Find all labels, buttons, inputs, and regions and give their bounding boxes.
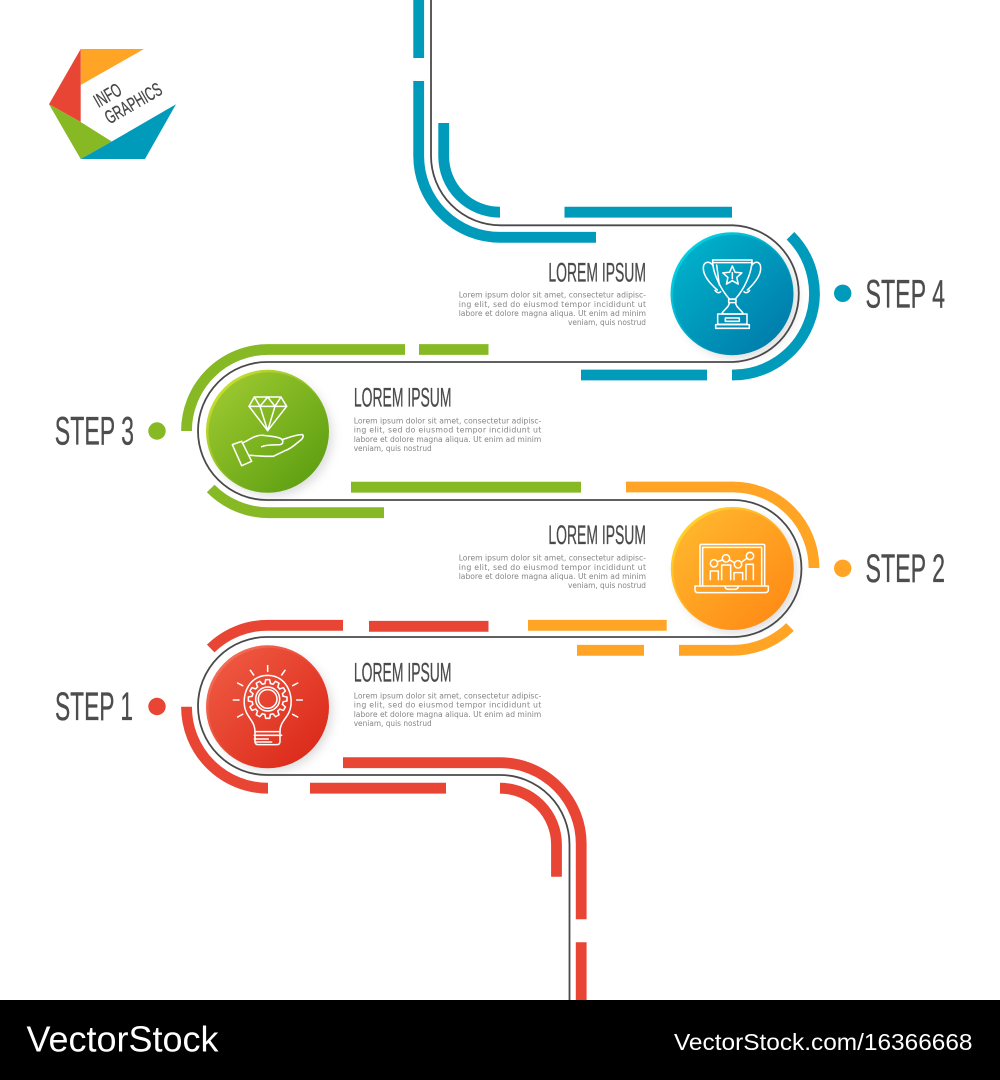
step 3 text block: labore et dolore magna aliqua. Ut enim ad minim xyxy=(354,435,541,444)
step 4 text block: Lorem ipsum dolor sit amet, consectetur adipisc- xyxy=(459,291,646,300)
icon: trophy xyxy=(703,260,761,328)
step 3 text block: ing elit, sed do eiusmod tempor incididunt ut xyxy=(354,426,541,435)
step 3 green road strips xyxy=(186,350,581,513)
logo: info graphics hexagon: INFO xyxy=(90,80,126,112)
step 3 text block xyxy=(354,383,541,453)
step 1 text block xyxy=(354,658,541,728)
step 3 badge: diamond in hand xyxy=(206,370,329,493)
logo: info graphics hexagon xyxy=(49,49,176,159)
footer bar: VectorStock.com/16366668 xyxy=(674,1029,972,1055)
step 1 text block: LOREM IPSUM xyxy=(354,658,452,688)
step 3 text block: Lorem ipsum dolor sit amet, consectetur adipisc- xyxy=(354,416,541,425)
step 4 teal road strips xyxy=(419,0,814,375)
step 1 badge: light bulb xyxy=(206,645,329,768)
step 3 text block: LOREM IPSUM xyxy=(354,383,452,413)
step 3 text block: veniam, quis nostrud xyxy=(354,444,432,453)
step 1 text block: labore et dolore magna aliqua. Ut enim ad minim xyxy=(354,710,541,719)
step 4 text block xyxy=(459,258,646,327)
step 2 text block: labore et dolore magna aliqua. Ut enim ad minim xyxy=(459,572,646,581)
winding road line xyxy=(198,0,801,1000)
step 2 label xyxy=(834,547,945,591)
icon: laptop xyxy=(695,544,768,593)
icon: diamond and hand xyxy=(232,397,303,466)
step 2 label: STEP 2 xyxy=(866,547,945,591)
icon: light bulb with gear xyxy=(233,666,302,745)
step 3 label: STEP 3 xyxy=(55,410,134,454)
step 1 text block: Lorem ipsum dolor sit amet, consectetur adipisc- xyxy=(354,691,541,700)
step 4 text block: ing elit, sed do eiusmod tempor incididunt ut xyxy=(459,300,646,309)
step 1 label: STEP 1 xyxy=(55,685,133,729)
step 4 label xyxy=(834,272,945,316)
icon shadows xyxy=(212,238,797,771)
footer bar xyxy=(0,1000,1000,1080)
footer bar: VectorStock xyxy=(26,1019,219,1060)
step 2 orange road strips xyxy=(528,487,814,650)
logo: info graphics hexagon: GRAPHICS xyxy=(102,79,166,129)
step 4 label: STEP 4 xyxy=(866,272,945,316)
step 4 text block: veniam, quis nostrud xyxy=(568,318,646,327)
step 2 text block: LOREM IPSUM xyxy=(548,520,646,550)
step 2 text block: veniam, quis nostrud xyxy=(568,581,646,590)
step 1 text block: ing elit, sed do eiusmod tempor incididunt ut xyxy=(354,701,541,710)
step 4 badge: trophy xyxy=(670,232,794,355)
step 1 red road strips xyxy=(186,625,581,1000)
step 1 text block: veniam, quis nostrud xyxy=(354,719,432,728)
step 2 badge: laptop chart xyxy=(671,507,794,630)
step 2 text block: ing elit, sed do eiusmod tempor incididunt ut xyxy=(459,563,646,572)
step 4 text block: labore et dolore magna aliqua. Ut enim ad minim xyxy=(459,309,646,318)
step 2 text block xyxy=(459,520,646,590)
step 4 text block: LOREM IPSUM xyxy=(548,258,646,288)
step 2 text block: Lorem ipsum dolor sit amet, consectetur adipisc- xyxy=(459,554,646,563)
